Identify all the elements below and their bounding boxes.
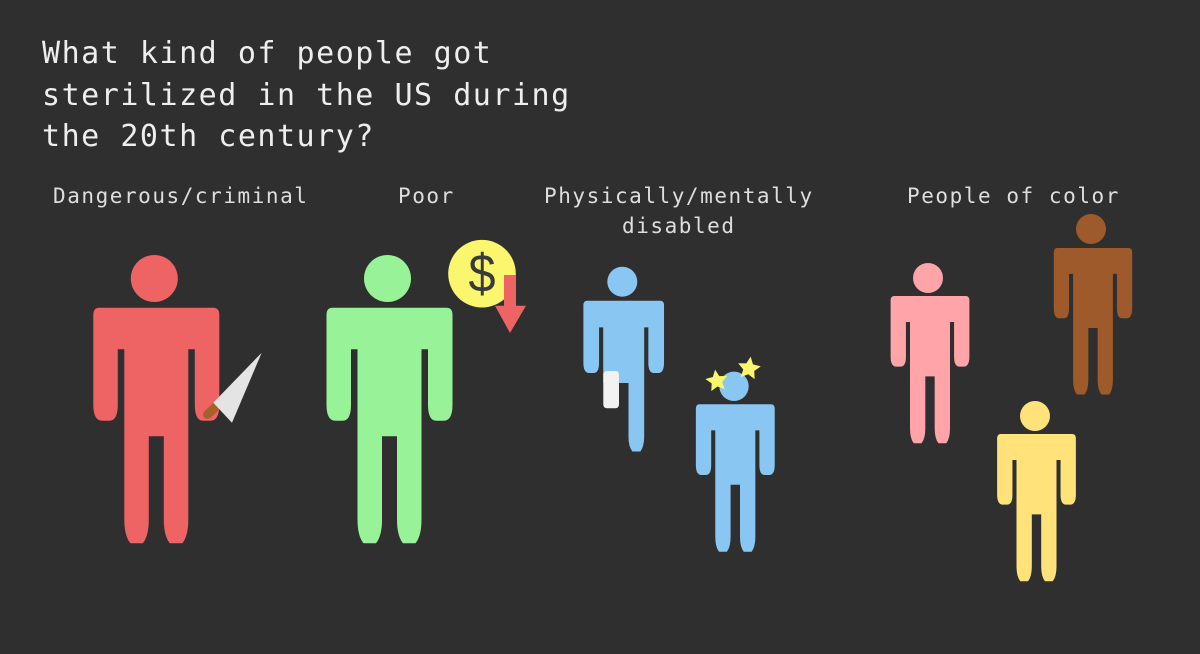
icon: dollar coin: $ xyxy=(468,243,496,304)
title: the 20th century? xyxy=(42,119,375,154)
blue person xyxy=(696,372,775,552)
heading: physically/mentally disabled: disabled xyxy=(622,214,736,238)
icon: star left xyxy=(704,368,729,392)
icon: star right xyxy=(736,355,762,380)
icon: dollar coin xyxy=(448,240,516,308)
heading: poor: Poor xyxy=(398,184,455,208)
heading: physically/mentally disabled: Physically/mentally xyxy=(544,184,814,208)
figure: one-legged blue person with prosthetic xyxy=(583,267,664,451)
icon: red down arrow xyxy=(495,275,526,333)
red person xyxy=(93,255,219,543)
icon: knife xyxy=(208,353,262,423)
figure: red criminal with knife xyxy=(93,255,262,543)
green person xyxy=(326,255,452,543)
figure: brown person xyxy=(1054,214,1132,395)
title: sterilized in the US during xyxy=(42,78,571,113)
heading: dangerous/criminal: Dangerous/criminal xyxy=(53,184,308,208)
title: What kind of people got xyxy=(42,36,492,71)
prosthetic leg xyxy=(603,371,619,408)
figure: green poor person with coin xyxy=(326,240,526,543)
figure: yellow person xyxy=(997,401,1076,581)
blue person xyxy=(583,267,664,451)
figure: pink person xyxy=(891,263,969,443)
heading: people of color: People of color xyxy=(907,184,1120,208)
figure: dizzy blue person with stars xyxy=(696,355,775,552)
